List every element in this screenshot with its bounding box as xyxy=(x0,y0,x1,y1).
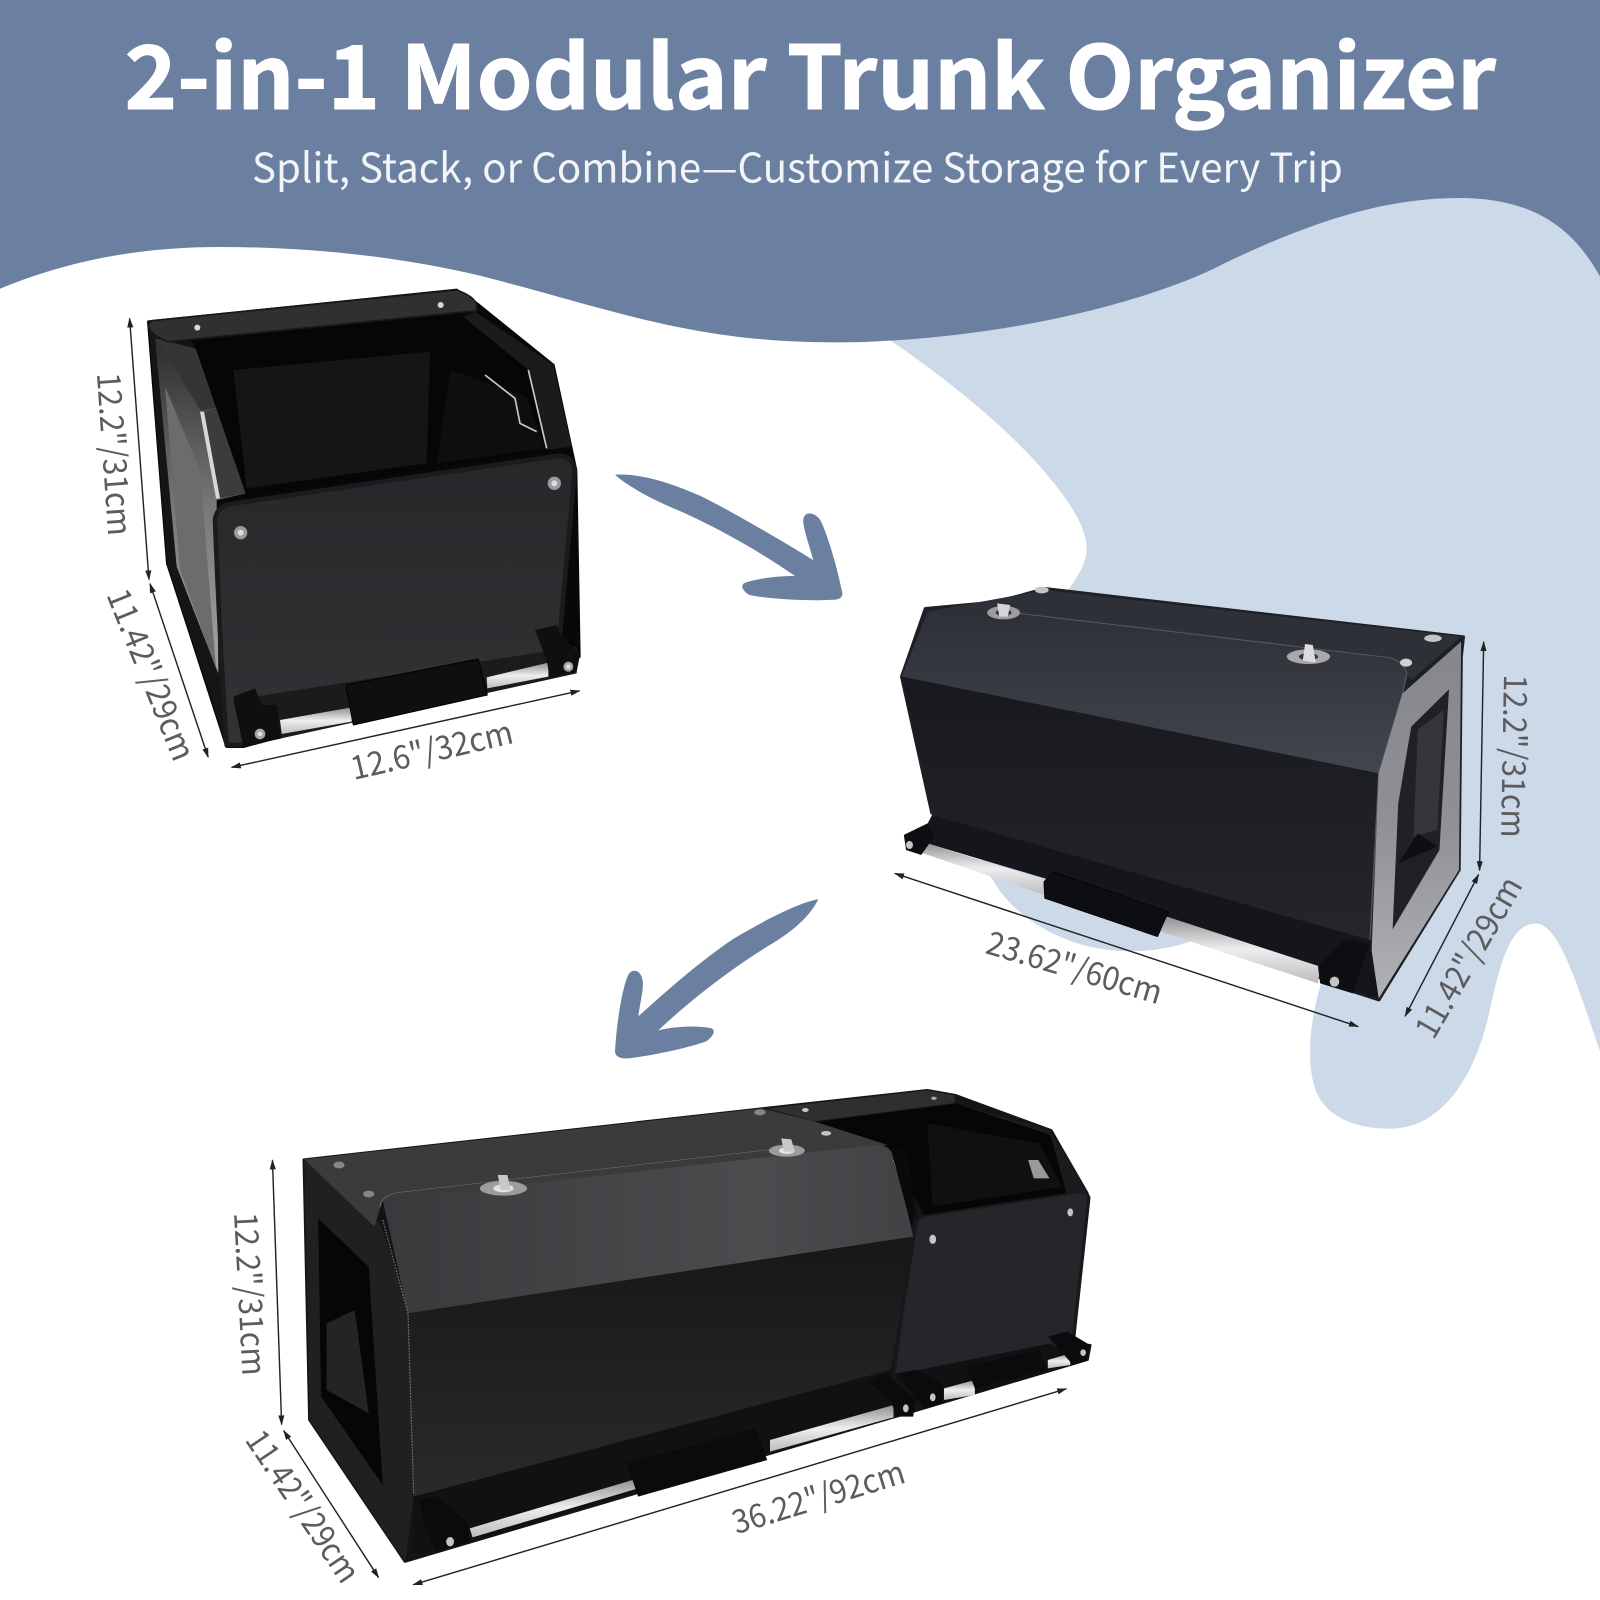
height arrow xyxy=(272,1160,282,1424)
handle xyxy=(346,659,487,725)
locks and screws xyxy=(333,1097,937,1197)
dimensions: single module xyxy=(87,318,580,790)
width arrow xyxy=(413,1389,1066,1585)
background blob: light blue xyxy=(878,194,1600,1129)
base rail xyxy=(233,647,577,747)
arrow: down-left brush arrow xyxy=(615,899,818,1058)
side frame xyxy=(1370,642,1461,998)
feet xyxy=(904,823,1370,993)
dimensions: long module xyxy=(895,642,1541,1046)
depth arrow xyxy=(150,584,208,757)
depth arrow xyxy=(1405,874,1479,1016)
dimensions: combined modules xyxy=(224,1160,1066,1591)
top lid xyxy=(148,290,477,342)
depth label: 11.42"/29cm xyxy=(236,1419,373,1591)
subtitle: Split, Stack, or Combine—Customize Storage for Every Trip xyxy=(252,136,1343,195)
arrow: down-right brush arrow xyxy=(615,474,842,600)
handle xyxy=(1044,872,1168,937)
height label: 12.2"/31cm xyxy=(1491,674,1541,838)
feet xyxy=(233,625,580,747)
product: combined long and open modules xyxy=(304,1090,1090,1562)
silver rails xyxy=(904,815,1379,998)
width label: 23.62"/60cm xyxy=(981,917,1169,1014)
header band: dark blue wave xyxy=(0,0,1600,342)
width arrow xyxy=(895,873,1358,1027)
height label: 12.2"/31cm xyxy=(87,371,145,537)
handles xyxy=(627,1350,1048,1497)
width arrow xyxy=(232,691,580,767)
height arrow xyxy=(130,318,149,580)
side frame with window xyxy=(304,1160,414,1562)
height label: 12.2"/31cm xyxy=(224,1211,279,1377)
width label: 12.6"/32cm xyxy=(345,707,517,790)
product: long module with wing locks xyxy=(902,587,1463,1000)
depth label: 11.42"/29cm xyxy=(1402,867,1532,1046)
long module body xyxy=(304,1108,916,1497)
base rails xyxy=(414,1343,1079,1553)
depth label: 11.42"/29cm xyxy=(97,581,208,767)
small module xyxy=(764,1090,1089,1377)
title: 2-in-1 Modular Trunk Organizer xyxy=(124,8,1497,135)
width label: 36.22"/92cm xyxy=(726,1447,910,1544)
feet xyxy=(419,1332,1090,1552)
depth arrow xyxy=(284,1431,379,1578)
product: single open module xyxy=(148,290,580,747)
front panel xyxy=(215,456,575,745)
wing locks and screws xyxy=(987,587,1442,667)
height arrow xyxy=(1480,642,1484,870)
